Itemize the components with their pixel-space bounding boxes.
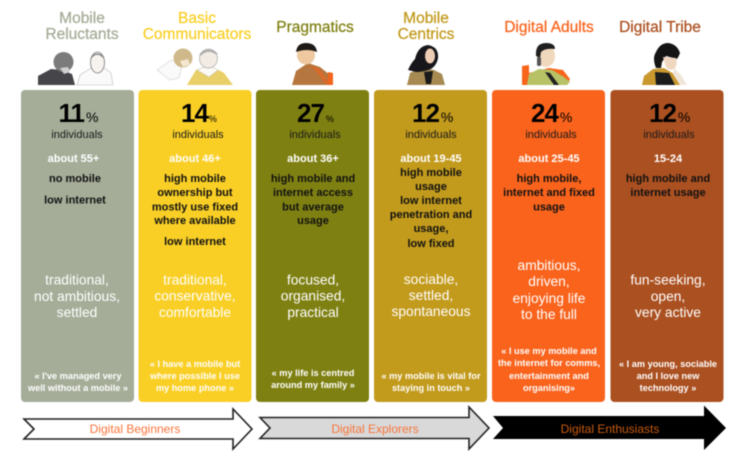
panel: Mobile Centrics: high mobile bbox=[400, 167, 462, 179]
arrow: Digital Explorers: Digital Explorers bbox=[331, 422, 419, 436]
panel: Mobile Reluctants: not ambitious, bbox=[34, 289, 120, 304]
panel: Mobile Reluctants: traditional, bbox=[45, 272, 109, 288]
panel: Basic Communicators: mostly use fixed bbox=[152, 202, 238, 214]
icon: woman, mobile centrics bbox=[407, 45, 445, 85]
panel: Mobile Reluctants bbox=[21, 90, 134, 402]
panel: Basic Communicators: comfortable bbox=[159, 305, 231, 320]
panel: Digital Tribe: high mobile and bbox=[626, 173, 710, 185]
heading: Mobile Centrics: Mobile bbox=[403, 10, 449, 27]
panel: Mobile Reluctants: about 55+ bbox=[48, 153, 99, 165]
heading: Digital Tribe: Digital Tribe bbox=[619, 19, 701, 36]
heading: Basic Communicators: Basic bbox=[178, 10, 216, 27]
panel: Pragmatics: about 36+ bbox=[287, 153, 339, 165]
arrow: Digital Enthusiasts bbox=[493, 406, 726, 450]
panel: Digital Adults: entertainment and bbox=[509, 371, 589, 381]
panel: Digital Tribe: individuals bbox=[643, 129, 695, 141]
panel: Digital Adults: to the full bbox=[521, 307, 577, 322]
panel: Basic Communicators: individuals bbox=[172, 129, 224, 141]
panel: Digital Adults: 24% bbox=[531, 98, 572, 128]
heading: Mobile Reluctants bbox=[45, 10, 119, 43]
panel: Pragmatics: focused, bbox=[287, 272, 339, 288]
panel: Digital Tribe bbox=[610, 90, 724, 402]
icon: two older people, mobile reluctants bbox=[38, 52, 113, 85]
panel: Pragmatics: around my family » bbox=[271, 380, 355, 390]
panel: Mobile Reluctants: individuals bbox=[51, 129, 103, 141]
panel: Mobile Centrics: 12% bbox=[412, 98, 453, 128]
panel: Basic Communicators: high mobile bbox=[164, 173, 226, 185]
panel: Digital Tribe: open, bbox=[651, 289, 685, 304]
panel: Digital Adults: driven, bbox=[528, 274, 570, 289]
icon: man on phone, digital adults bbox=[522, 43, 570, 85]
panel: Pragmatics bbox=[256, 90, 369, 402]
panel: Digital Adults: organising» bbox=[523, 383, 575, 393]
panel: Digital Tribe: 15-24 bbox=[654, 153, 683, 165]
arrow: Digital Explorers bbox=[260, 407, 489, 449]
panel: Pragmatics: organised, bbox=[281, 288, 345, 304]
panel: Basic Communicators: « I have a mobile but bbox=[150, 359, 240, 369]
arrow: Digital Beginners bbox=[24, 409, 252, 449]
panel: Digital Tribe: internet usage bbox=[630, 187, 706, 199]
panel: Basic Communicators: ownership but bbox=[157, 187, 233, 199]
panel: Mobile Reluctants: settled bbox=[57, 305, 97, 320]
panel: Digital Adults: internet and fixed bbox=[503, 187, 595, 199]
heading: Mobile Centrics bbox=[398, 10, 455, 43]
arrow: Digital Beginners: Digital Beginners bbox=[90, 422, 180, 436]
panel: Digital Tribe: « I am young, sociable bbox=[619, 359, 717, 369]
arrow: Digital Enthusiasts: Digital Enthusiasts bbox=[561, 422, 659, 436]
icon: person, pragmatics bbox=[292, 43, 333, 85]
panel: Pragmatics: high mobile and bbox=[271, 173, 355, 185]
panel: Mobile Centrics: penetration and bbox=[390, 209, 472, 221]
panel: Pragmatics: 27% bbox=[297, 98, 334, 128]
panel: Mobile Reluctants: no mobile bbox=[49, 173, 101, 185]
panel: Digital Adults: enjoying life bbox=[513, 291, 586, 306]
panel: Basic Communicators bbox=[138, 90, 252, 402]
heading: Basic Communicators: Communicators bbox=[143, 26, 252, 43]
panel: Mobile Reluctants: 11% bbox=[58, 98, 98, 128]
panel: Mobile Reluctants: well without a mobile » bbox=[27, 383, 128, 393]
panel: Basic Communicators: traditional, bbox=[163, 272, 227, 288]
panel: Mobile Centrics: usage bbox=[415, 181, 447, 193]
panel: Basic Communicators: my home phone » bbox=[156, 383, 234, 393]
panel: Basic Communicators: where available bbox=[153, 215, 236, 227]
panel: Digital Tribe: very active bbox=[635, 305, 701, 320]
panel: Digital Adults: high mobile, bbox=[517, 173, 581, 185]
panel: Digital Adults: individuals bbox=[525, 129, 577, 141]
panel: Digital Adults: « I use my mobile and bbox=[501, 346, 597, 356]
panel: Basic Communicators: conservative, bbox=[154, 288, 236, 304]
heading: Mobile Reluctants: Reluctants bbox=[45, 26, 119, 43]
panel: Digital Tribe: 12% bbox=[649, 98, 690, 128]
icon: two people, basic communicators bbox=[157, 48, 233, 85]
panel: Basic Communicators: where possible I use bbox=[149, 371, 240, 381]
panel: Basic Communicators: 14% bbox=[181, 98, 217, 128]
panel: Mobile Centrics: low fixed bbox=[407, 238, 455, 250]
panel: Basic Communicators: low internet bbox=[164, 236, 226, 248]
panel: Pragmatics: practical bbox=[287, 305, 339, 320]
panel: Pragmatics: usage bbox=[297, 215, 329, 227]
heading: Mobile Centrics: Centrics bbox=[398, 26, 455, 43]
panel: Digital Tribe: and I love new bbox=[637, 371, 700, 381]
heading: Pragmatics: Pragmatics bbox=[276, 19, 354, 36]
panel: Digital Tribe: technology » bbox=[640, 383, 696, 393]
panel: Mobile Centrics: low internet bbox=[400, 195, 462, 207]
panel: Mobile Centrics: usage, bbox=[414, 223, 448, 235]
panel: Mobile Reluctants: low internet bbox=[44, 194, 106, 206]
panel: Mobile Centrics: spontaneous bbox=[391, 304, 471, 319]
panel: Mobile Centrics: individuals bbox=[405, 129, 457, 141]
panel: Digital Adults: ambitious, bbox=[518, 258, 580, 273]
panel: Mobile Centrics: about 19-45 bbox=[400, 153, 462, 165]
panel: Mobile Centrics: settled, bbox=[409, 288, 453, 303]
panel: Basic Communicators: about 46+ bbox=[169, 153, 221, 165]
panel: Mobile Reluctants: « I've managed very bbox=[35, 371, 122, 381]
heading: Digital Adults: Digital Adults bbox=[504, 19, 594, 36]
panel: Pragmatics: « my life is centred bbox=[272, 368, 354, 378]
panel: Mobile Centrics: staying in touch » bbox=[392, 383, 470, 393]
panel: Mobile Centrics: sociable, bbox=[404, 272, 458, 287]
panel: Pragmatics: but average bbox=[282, 202, 344, 214]
panel: Digital Adults: about 25-45 bbox=[518, 153, 580, 165]
panel: Mobile Centrics bbox=[374, 90, 487, 402]
panel: Digital Adults: the internet for comms, bbox=[498, 358, 600, 368]
panel: Digital Adults: usage bbox=[533, 202, 565, 214]
heading: Basic Communicators bbox=[143, 10, 252, 43]
panel: Digital Adults bbox=[492, 90, 605, 402]
panel: Pragmatics: individuals bbox=[289, 129, 341, 141]
heading: Mobile Reluctants: Mobile bbox=[59, 10, 105, 27]
icon: young woman, digital tribe bbox=[642, 43, 687, 85]
panel: Digital Tribe: fun-seeking, bbox=[630, 272, 706, 288]
panel: Mobile Centrics: « my mobile is vital for bbox=[381, 371, 481, 381]
panel: Pragmatics: internet access bbox=[273, 187, 353, 199]
